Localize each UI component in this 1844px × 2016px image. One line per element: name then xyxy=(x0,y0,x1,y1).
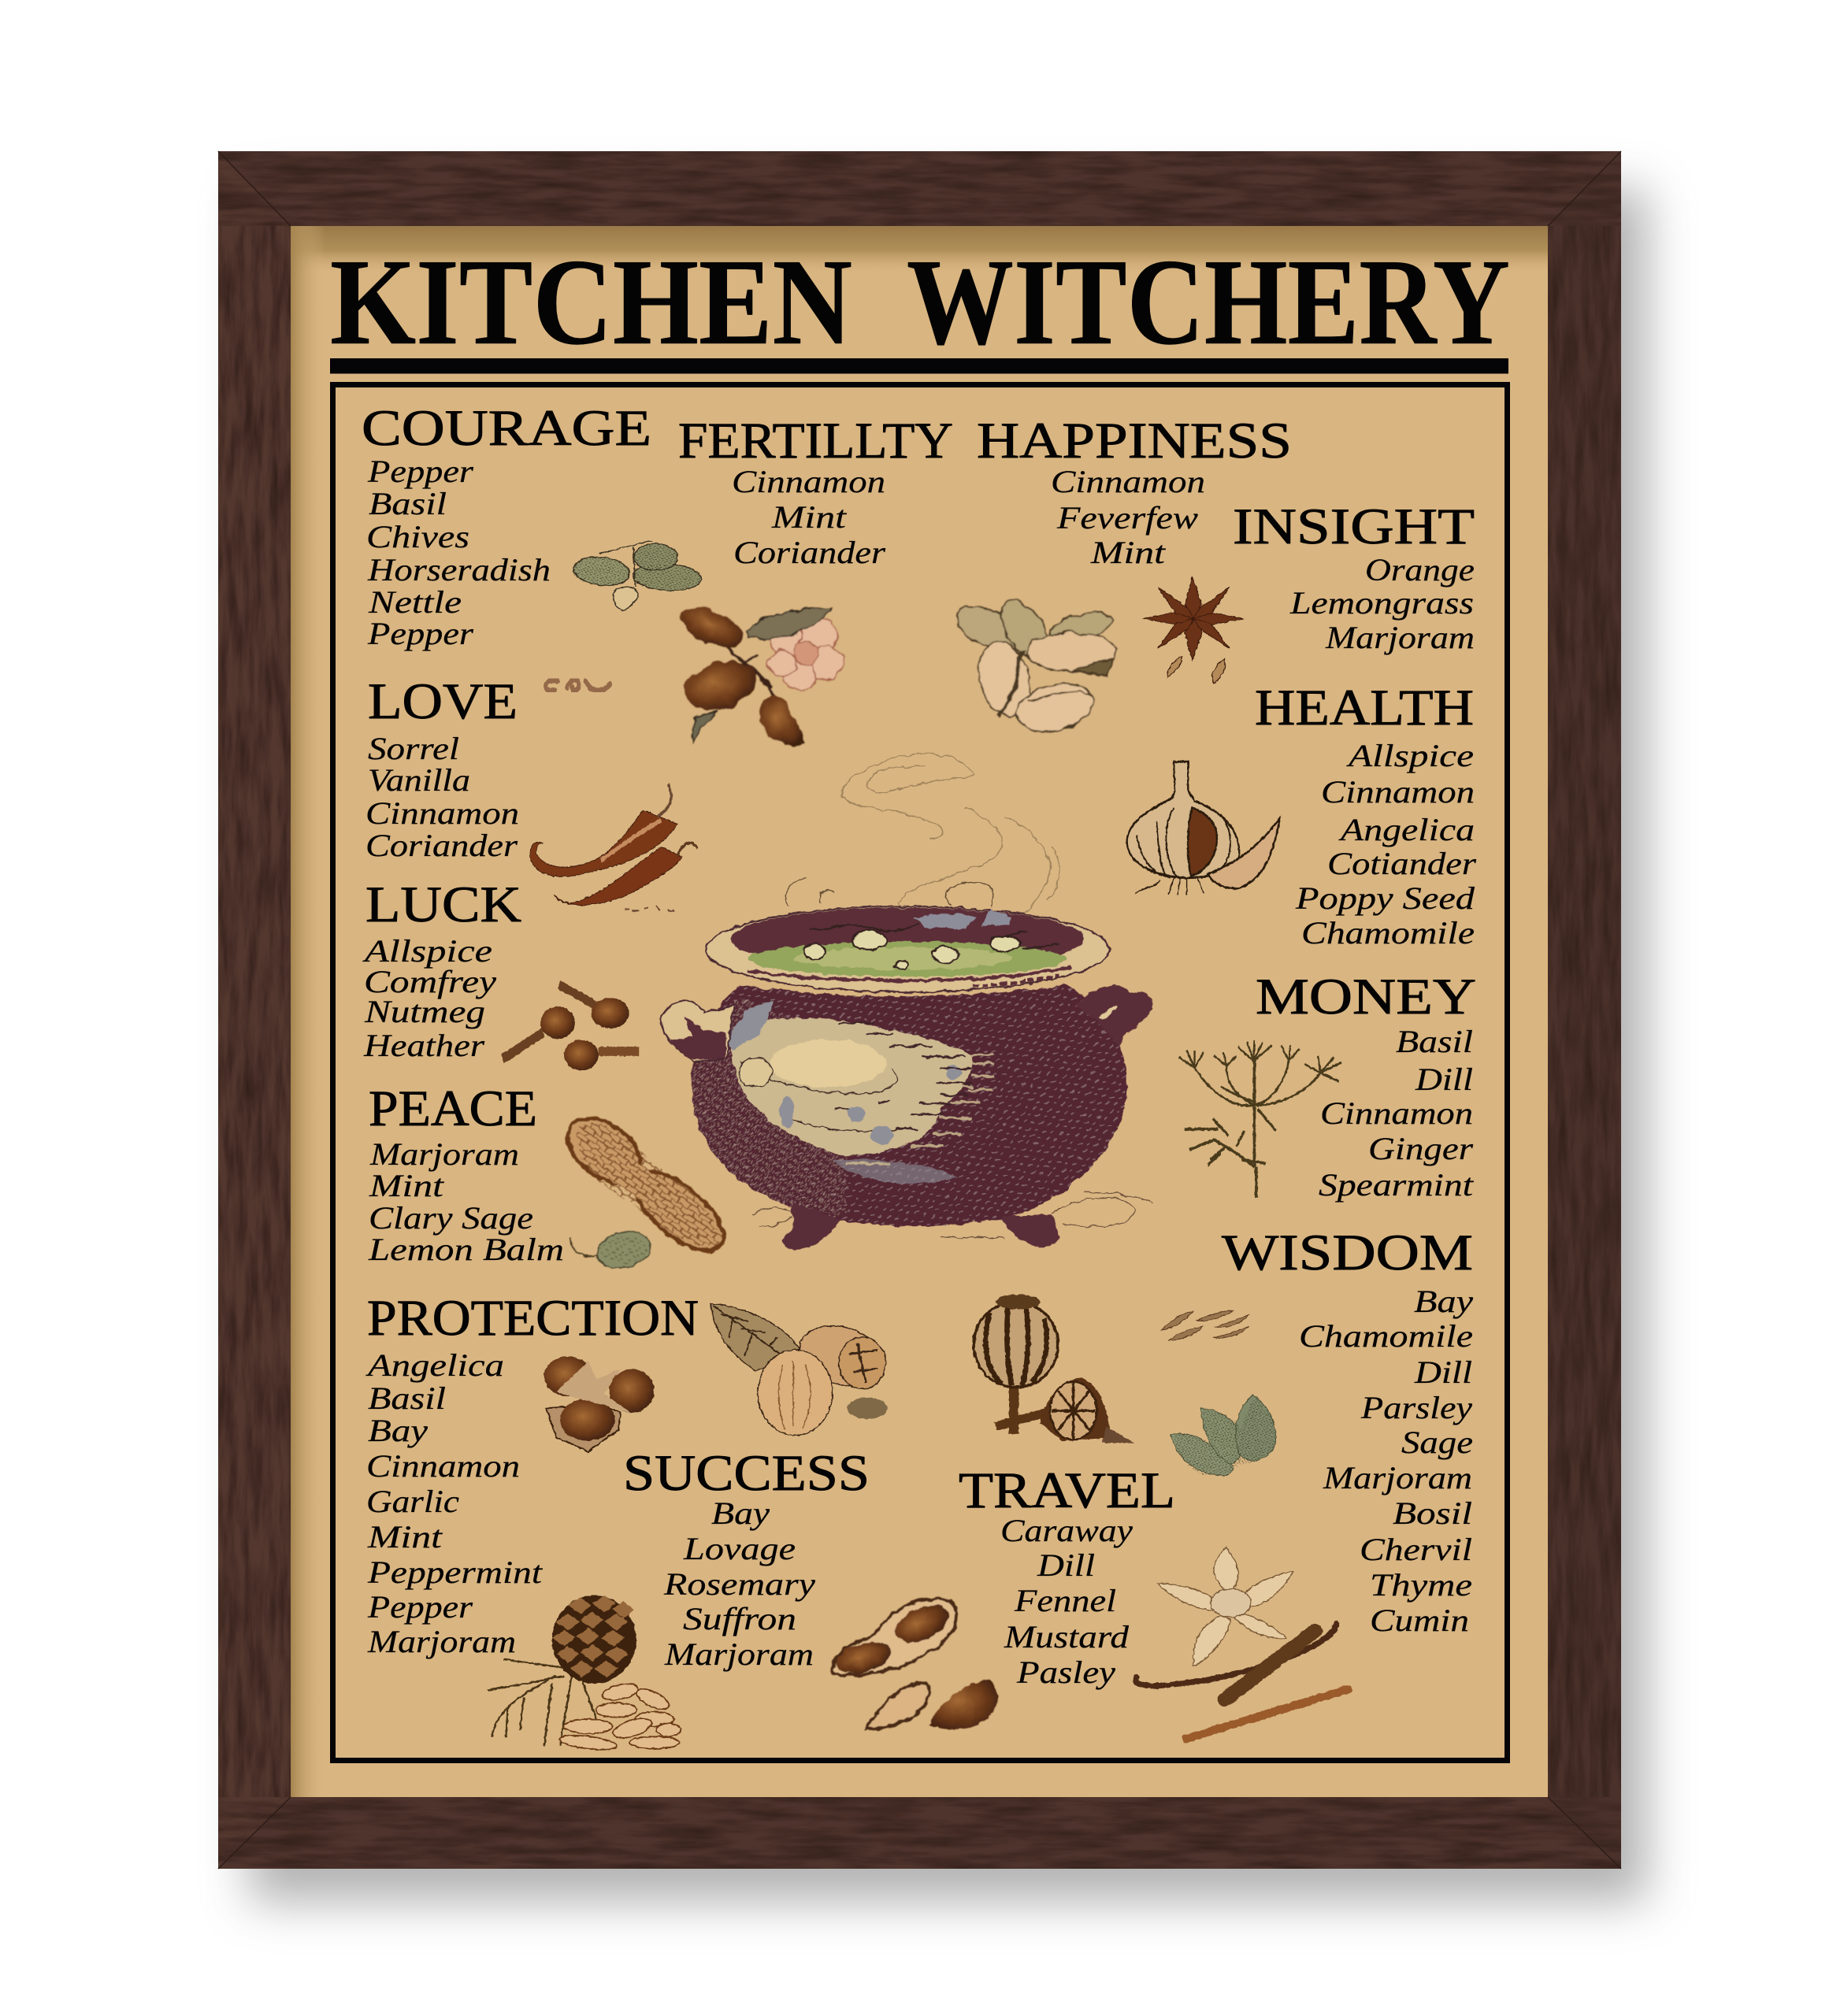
list: love: Vanilla xyxy=(368,762,470,798)
list: fertility: Mint xyxy=(771,499,847,535)
list: protection: Pepper xyxy=(367,1589,473,1625)
list: wisdom: Marjoram xyxy=(1323,1460,1472,1495)
list: wisdom: Chervil xyxy=(1360,1532,1472,1567)
list: success: Lovage xyxy=(683,1531,796,1566)
section: insight xyxy=(1233,498,1475,655)
list: courage: Nettle xyxy=(368,584,462,620)
illustration: nuts and blossom xyxy=(677,598,843,746)
list: money xyxy=(1319,1024,1474,1203)
dumplings xyxy=(804,925,1059,969)
illustration: vanilla bean and cinnamon sticks xyxy=(1136,1623,1348,1739)
list: peace: Lemon Balm xyxy=(368,1232,564,1267)
list: protection xyxy=(365,1347,543,1659)
section: peace xyxy=(368,1080,564,1267)
illustration: chillies xyxy=(530,784,698,911)
heading: happiness: HAPPINESS xyxy=(977,413,1292,469)
illustration: vanilla flower xyxy=(1158,1547,1293,1666)
heading: health: HEALTH xyxy=(1255,680,1474,736)
list: peace: Mint xyxy=(369,1168,444,1203)
list: health xyxy=(1295,738,1476,951)
ground strokes xyxy=(751,1191,1153,1237)
inner border xyxy=(332,384,1508,1761)
list: protection: Marjoram xyxy=(367,1624,516,1659)
list: protection: Cinnamon xyxy=(366,1448,520,1484)
list: happiness: Feverfew xyxy=(1056,500,1198,536)
section: happiness xyxy=(977,413,1292,570)
illustration: garlic xyxy=(1127,762,1280,895)
list: love: Sorrel xyxy=(368,731,459,766)
list: courage: Chives xyxy=(366,519,469,554)
heading: fertility: FERTILLTY xyxy=(678,413,953,469)
list: wisdom: Dill xyxy=(1414,1354,1472,1390)
list: insight: Marjoram xyxy=(1325,620,1475,655)
brush strokes on body edge xyxy=(835,1023,972,1128)
heading: peace: PEACE xyxy=(369,1080,537,1137)
list: courage: Pepper xyxy=(367,454,473,489)
list: peace: Marjoram xyxy=(369,1136,519,1172)
list: success xyxy=(663,1495,815,1672)
list: wisdom xyxy=(1299,1284,1473,1638)
list: love: Cinnamon xyxy=(365,795,519,831)
list: success: Bay xyxy=(711,1495,770,1531)
section: travel xyxy=(959,1462,1175,1690)
title xyxy=(330,233,1510,370)
list: protection: Mint xyxy=(367,1519,443,1555)
right handle xyxy=(1075,986,1152,1046)
list: protection: Garlic xyxy=(366,1484,459,1519)
illustration: peanut shell xyxy=(556,1105,736,1264)
list: courage xyxy=(366,454,551,651)
interior xyxy=(730,908,1085,969)
title: KITCHEN xyxy=(330,233,852,370)
list: insight: Lemongrass xyxy=(1289,585,1474,621)
list: health: Cotiander xyxy=(1327,846,1476,881)
section: money xyxy=(1256,969,1476,1203)
section: success xyxy=(623,1445,870,1672)
illustration: seeds xyxy=(1162,1310,1249,1340)
illustration: dill xyxy=(1179,1040,1341,1198)
list: health: Chamomile xyxy=(1301,915,1475,951)
list: fertility: Cinnamon xyxy=(732,464,885,499)
highlight xyxy=(770,1040,885,1088)
illustration: nutmeg and leaf xyxy=(711,1303,893,1436)
heading: protection: PROTECTION xyxy=(367,1290,699,1347)
list: health: Allspice xyxy=(1345,738,1474,773)
list: peace xyxy=(368,1136,564,1267)
illustration: green leaf by lemon balm xyxy=(570,1227,654,1273)
list: insight: Orange xyxy=(1365,552,1475,587)
heading: love: LOVE xyxy=(368,673,518,730)
illustration: pistachios xyxy=(949,592,1116,739)
heading: money: MONEY xyxy=(1256,969,1476,1025)
list: health: Cinnamon xyxy=(1321,774,1475,810)
list: fertility xyxy=(732,464,885,570)
list: courage: Basil xyxy=(369,486,447,521)
list: success: Rosemary xyxy=(663,1566,815,1602)
list: health: Poppy Seed xyxy=(1295,880,1475,916)
steam xyxy=(786,754,1059,921)
list: money: Dill xyxy=(1415,1062,1473,1097)
section: love xyxy=(365,673,519,863)
list: success: Marjoram xyxy=(664,1636,814,1672)
list: success: Suffron xyxy=(683,1601,796,1636)
list: love: Coriander xyxy=(365,828,518,863)
list: travel: Mustard xyxy=(1004,1619,1130,1655)
list: money: Cinnamon xyxy=(1320,1095,1473,1131)
soup xyxy=(748,942,1067,976)
illustration: hazelnuts xyxy=(544,1357,654,1451)
list: protection: Bay xyxy=(368,1413,428,1448)
heading: courage: COURAGE xyxy=(362,400,651,457)
list: luck xyxy=(362,933,496,1063)
list: protection: Angelica xyxy=(365,1347,504,1383)
rim xyxy=(706,906,1109,992)
section: fertility xyxy=(678,413,953,570)
section: protection xyxy=(365,1290,699,1659)
illustration: cloves xyxy=(503,984,639,1070)
wooden frame xyxy=(218,151,1621,1869)
list: courage: Horseradish xyxy=(367,552,551,587)
section: health xyxy=(1255,680,1476,951)
list: love xyxy=(365,731,519,863)
list: fertility: Coriander xyxy=(733,535,885,570)
illustration: leafy seed near courage xyxy=(571,540,703,611)
light side of body xyxy=(731,1017,973,1156)
title: WITCHERY xyxy=(907,233,1510,370)
list: travel: Pasley xyxy=(1016,1655,1115,1690)
list: insight xyxy=(1289,552,1475,655)
list: wisdom: Bay xyxy=(1414,1284,1473,1319)
list: travel: Dill xyxy=(1037,1547,1095,1583)
illustration: open peanut and almonds xyxy=(833,1598,998,1729)
illustration: poppy pod and citrus xyxy=(974,1295,1134,1443)
heading: luck: LUCK xyxy=(365,876,521,933)
illustration: mint leaves xyxy=(1171,1395,1276,1476)
list: wisdom: Parsley xyxy=(1360,1390,1472,1425)
list: travel: Fennel xyxy=(1014,1583,1116,1618)
heading: travel: TRAVEL xyxy=(959,1462,1175,1519)
list: luck: Heather xyxy=(363,1028,485,1063)
list: happiness xyxy=(1051,464,1205,570)
list: health: Angelica xyxy=(1338,812,1475,847)
grey patches xyxy=(725,1000,961,1183)
list: money: Basil xyxy=(1396,1024,1473,1059)
list: courage: Pepper xyxy=(367,616,473,651)
list: happiness: Cinnamon xyxy=(1051,464,1205,499)
list: travel xyxy=(1000,1513,1133,1690)
frame shadow xyxy=(249,189,1647,1902)
list: protection: Peppermint xyxy=(367,1555,543,1590)
list: protection: Basil xyxy=(368,1380,446,1416)
heading: insight: INSIGHT xyxy=(1233,498,1475,555)
list: luck: Comfrey xyxy=(364,964,496,999)
right foot xyxy=(1001,1214,1059,1247)
illustration: pine cone and pine nuts xyxy=(488,1595,681,1752)
list: travel: Caraway xyxy=(1000,1513,1133,1548)
list: money: Ginger xyxy=(1368,1131,1473,1166)
section: wisdom xyxy=(1222,1225,1473,1638)
poster background xyxy=(291,226,1548,1797)
left foot xyxy=(784,1203,840,1250)
body xyxy=(692,984,1128,1226)
list: wisdom: Cumin xyxy=(1370,1603,1469,1638)
list: wisdom: Chamomile xyxy=(1299,1318,1473,1354)
title rule xyxy=(330,358,1508,373)
illustration: cauldron xyxy=(661,754,1153,1250)
list: luck: Nutmeg xyxy=(364,994,485,1029)
list: wisdom: Bosil xyxy=(1393,1495,1472,1531)
illustration: star anise xyxy=(1144,576,1244,684)
list: wisdom: Thyme xyxy=(1370,1567,1472,1603)
heading: wisdom: WISDOM xyxy=(1222,1225,1473,1281)
list: peace: Clary Sage xyxy=(369,1200,533,1236)
section: luck xyxy=(362,876,521,1063)
illustration: curled spice near love xyxy=(546,680,610,691)
list: wisdom: Sage xyxy=(1401,1425,1473,1460)
left handle xyxy=(661,1000,733,1062)
heading: success: SUCCESS xyxy=(623,1445,870,1502)
list: luck: Allspice xyxy=(362,933,492,969)
list: happiness: Mint xyxy=(1090,535,1166,570)
list: money: Spearmint xyxy=(1319,1167,1474,1203)
section: courage xyxy=(362,400,651,651)
